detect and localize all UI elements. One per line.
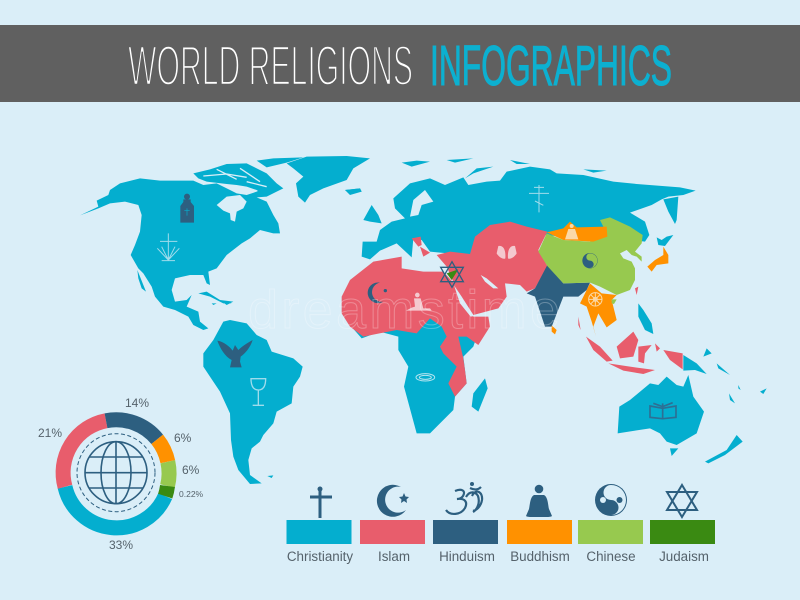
sea: Persian Gulf and Red Sea [454,275,498,317]
legend: Judaism [650,485,715,564]
landmass: Eurasia base [362,167,696,259]
title banner [0,25,800,102]
legend: Christianity [286,486,353,564]
legend [286,482,715,564]
donut labels: 33% [109,538,133,552]
legend: Chinese: Chinese [586,549,636,564]
map icons: Americas [157,194,266,405]
islands: Arctic and Britain [345,158,607,223]
sea: Baltic [410,190,433,217]
islands: Indonesia [578,287,683,374]
region: Buddhism Southeast Asia [580,283,617,337]
watermark: dreamstime [248,280,560,340]
legend: Buddhism [507,485,572,564]
region: Islam [342,257,490,397]
region: Buddhism Mongolia [547,222,607,242]
donut labels: 6% [182,463,200,477]
icon: anchor crown on map [157,233,179,261]
segment: Chinese 6% [168,462,169,486]
region: Buddhism Japan and Sri Lanka [552,247,668,334]
icon: meditating figure on map [565,224,578,239]
islands: Philippines and New Guinea [638,303,730,375]
world map [80,156,767,484]
icon: hands on map [497,246,517,259]
donut labels: 0.22% [179,489,204,499]
legend: Islam [360,485,425,564]
title banner: WORLD RELIGIONS [128,34,413,98]
legend: Chinese [578,484,643,564]
legend: Judaism: Judaism [659,549,709,564]
legend: Hinduism: Hinduism [439,549,495,564]
dashed ring [77,434,155,512]
map: Eurasia, Africa, Oceania [342,158,767,463]
legend: Buddhism: Buddhism [510,549,570,564]
icon: star of David on map [441,262,463,287]
legend: Christianity: Christianity [287,549,353,564]
icon: chalice on map [251,379,266,405]
segment: Buddhism 6% [157,439,168,462]
region: Africa sub-Saharan [350,317,477,433]
segment: Judaism 0.22% [165,486,168,496]
segment: Hinduism 14% [106,420,157,439]
icon: dharma wheel on map [589,293,602,306]
continent: Australia [618,375,704,445]
segment: Christianity 33% [65,487,165,528]
icon: globe [85,442,147,504]
icon: crescent on map [368,282,387,303]
icon: crown of thorns on map [416,374,435,381]
region: Judaism Israel [447,269,458,280]
donut labels [38,396,204,552]
icon: Bible on map [180,194,194,223]
map: Americas [80,156,370,484]
peninsula: Kamchatka and Sakhalin [657,197,678,246]
donut chart [63,420,169,528]
legend: Hinduism [433,482,498,564]
region: Chinese [538,217,643,295]
island: Madagascar [472,378,488,412]
icon: orthodox cross on map [529,185,549,212]
segment: Islam 21% [63,421,106,487]
icon: yin yang on map [582,253,598,268]
icon: prayer on map [406,293,432,311]
region: Hinduism [527,265,590,327]
donut labels: 6% [174,431,192,445]
icon: open book on map [650,403,676,419]
donut labels: 21% [38,426,62,440]
legend: Islam: Islam [378,549,410,564]
donut labels: 14% [125,396,149,410]
icon: dove on map [217,340,253,367]
